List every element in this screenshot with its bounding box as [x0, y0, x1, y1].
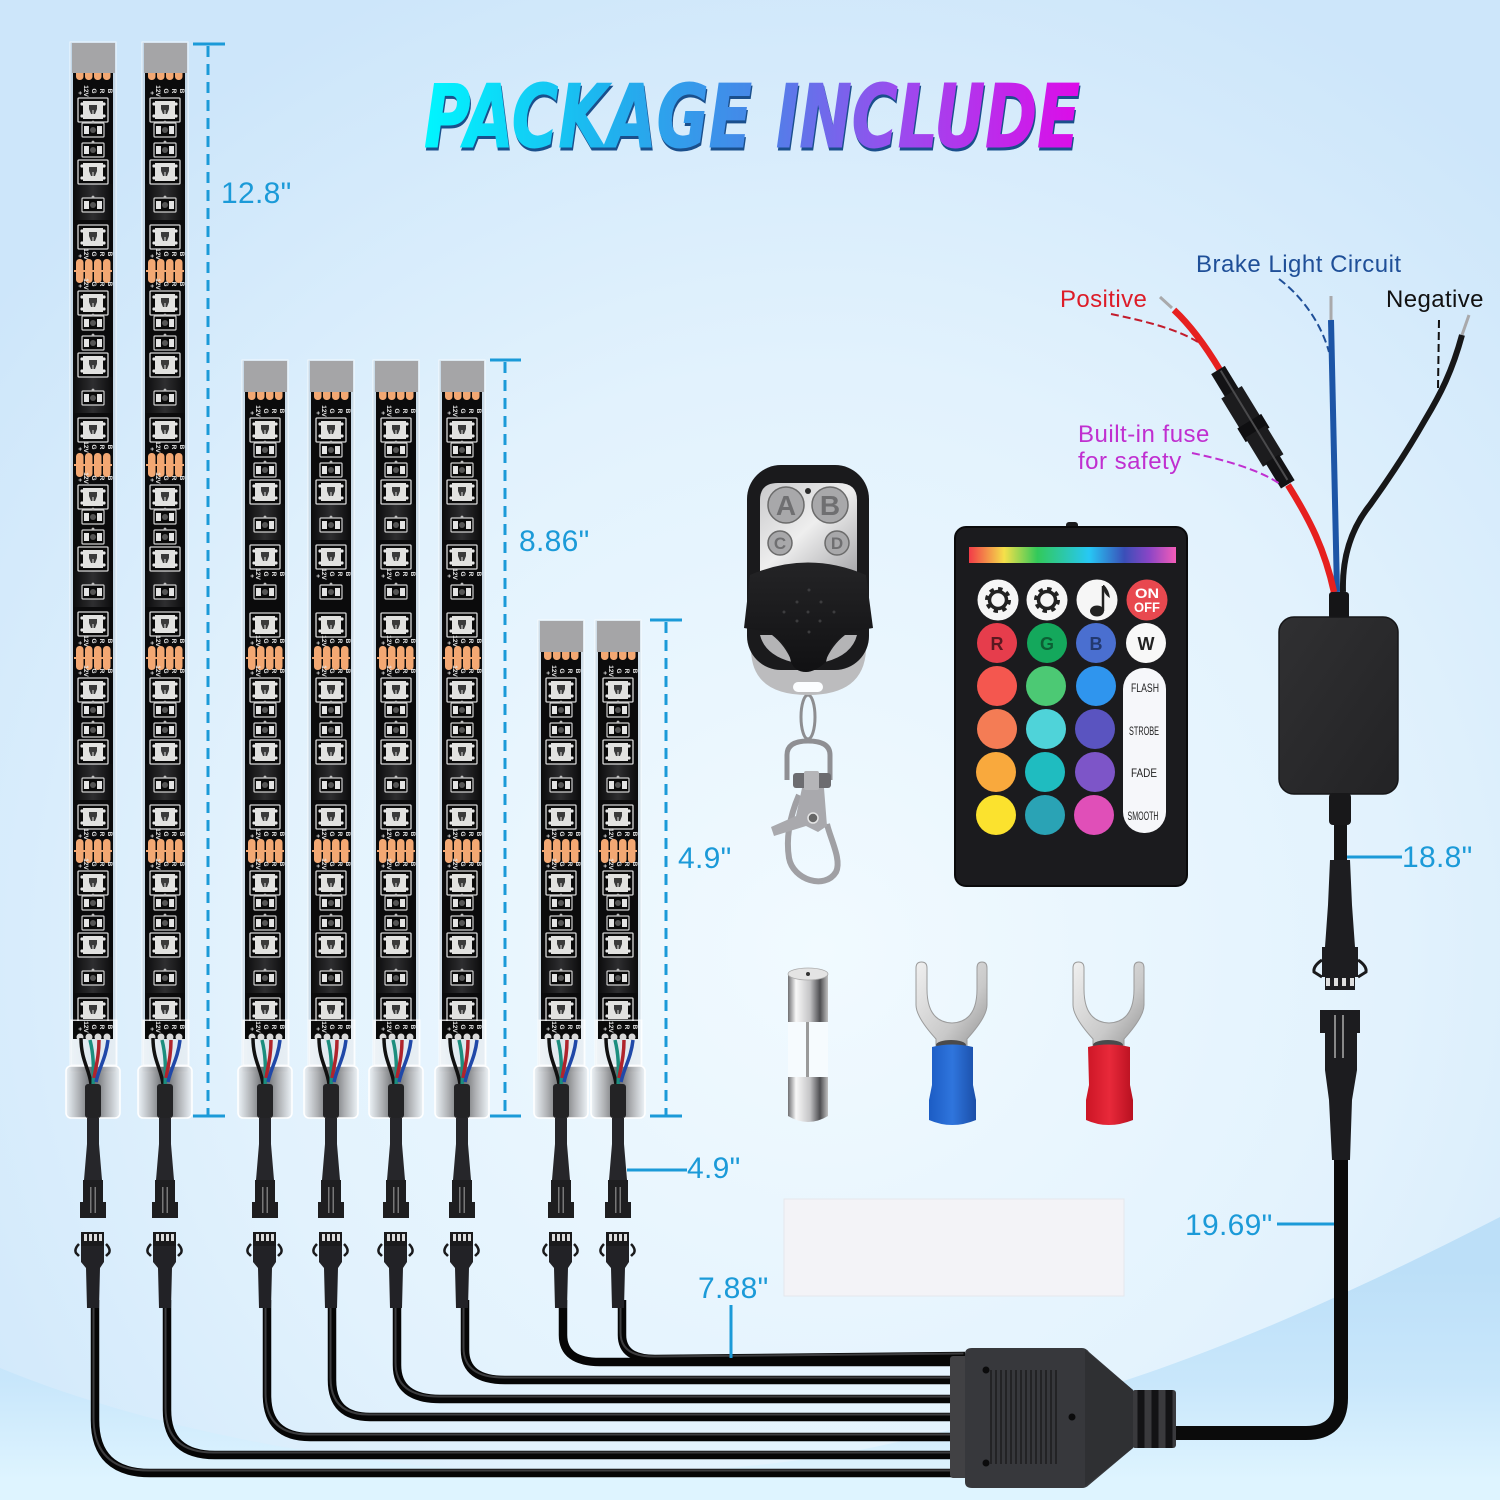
LED strip long 2	[138, 42, 192, 1308]
hub ribs	[1132, 1390, 1176, 1448]
LED strip short 1	[534, 620, 588, 1308]
label: built-in fuse: Built-in fuse	[1078, 421, 1210, 448]
label: brake light circuit: Brake Light Circuit	[1196, 251, 1402, 278]
junction hub	[950, 1150, 1341, 1488]
fob silver plate with buttons	[760, 483, 857, 572]
label: brake light circuit	[1196, 251, 1402, 352]
hub body	[965, 1348, 1133, 1488]
LED strip long 1	[66, 42, 120, 1308]
title: PACKAGE	[424, 66, 752, 168]
keychain clasp	[771, 741, 838, 881]
label: built-in fuse: for safety	[1078, 448, 1182, 475]
power wires	[1160, 296, 1469, 592]
dimension 8.86 inch: 8.86"	[519, 525, 590, 558]
dimension 12.8 inch	[193, 44, 292, 1116]
dimension 7.88 inch: 7.88"	[698, 1272, 769, 1305]
LED strip medium 3	[369, 360, 423, 1308]
dimension 12.8 inch: 12.8"	[221, 177, 292, 210]
LED strip medium 1	[238, 360, 292, 1308]
IR remote control	[955, 522, 1187, 886]
fob dots	[782, 588, 836, 634]
mode buttons row	[978, 580, 1168, 620]
fob rubber sleeve	[744, 562, 873, 672]
fob black shell	[747, 465, 869, 670]
dimension 4.9 inch cable	[627, 1152, 741, 1185]
red wire	[1174, 310, 1334, 592]
adhesive sticker	[784, 1199, 1124, 1296]
control box	[1279, 592, 1398, 825]
control box lower cable and connectors	[1314, 825, 1366, 1160]
mode buttons row: OFF	[1134, 599, 1160, 615]
black wire	[1343, 335, 1462, 592]
RGBW buttons: W	[1138, 634, 1154, 654]
dimension 7.88 inch	[698, 1272, 769, 1358]
dimension 8.86 inch	[490, 360, 590, 1116]
LED strip medium 4	[435, 360, 489, 1308]
blue fork terminal	[916, 962, 987, 1125]
fob silver plate with buttons: A	[776, 490, 796, 521]
dimension 4.9 inch cable: 4.9"	[687, 1152, 741, 1185]
fob silver plate with buttons: B	[820, 490, 840, 521]
hub to box cable	[1170, 1150, 1341, 1433]
inline fuse holder	[1206, 363, 1300, 492]
label: positive	[1060, 286, 1198, 342]
dimension 19.69 inch: 19.69"	[1185, 1209, 1273, 1242]
dimension 4.9 inch strip: 4.9"	[678, 842, 732, 875]
LED strip short 2	[591, 620, 645, 1308]
key fob remote	[744, 465, 873, 881]
colour buttons	[976, 666, 1116, 835]
label: negative: Negative	[1386, 286, 1484, 313]
LED strip medium 2	[304, 360, 358, 1308]
rainbow bar	[969, 547, 1176, 563]
mode pill: SMOOTH	[1128, 809, 1158, 823]
wire strand tips	[1160, 296, 1469, 335]
label: negative	[1386, 286, 1484, 388]
RGBW buttons: G	[1040, 634, 1054, 654]
hub ribbed panel	[991, 1370, 1056, 1464]
RGBW buttons: R	[990, 634, 1004, 654]
keychain ring	[801, 695, 815, 739]
title	[424, 66, 1080, 168]
dimension 4.9 inch strip	[650, 620, 732, 1116]
fob silver side wedges	[760, 635, 857, 662]
label: positive: Positive	[1060, 286, 1147, 313]
title: INCLUDE	[776, 66, 1080, 168]
dimension 18.8 inch: 18.8"	[1402, 841, 1473, 874]
fob silver plate with buttons: D	[831, 534, 843, 553]
glass fuse	[788, 968, 828, 1122]
mode pill: STROBE	[1129, 724, 1159, 738]
fob chrome base	[751, 650, 866, 695]
blue wire	[1331, 320, 1337, 592]
mode buttons row: ON	[1135, 585, 1159, 601]
fob hole	[793, 682, 823, 692]
mode pill: FLASH	[1131, 681, 1159, 695]
label: built-in fuse	[1078, 421, 1280, 484]
mode pill	[1123, 668, 1166, 833]
remote body	[1066, 522, 1078, 530]
fob silver plate with buttons: C	[774, 534, 786, 553]
dimension 18.8 inch	[1344, 841, 1473, 874]
mode pill: FADE	[1131, 766, 1157, 780]
cables from strips to hub	[94, 1298, 965, 1473]
RGBW buttons	[977, 623, 1166, 663]
red fork terminal	[1073, 962, 1144, 1125]
RGBW buttons: B	[1090, 634, 1102, 654]
